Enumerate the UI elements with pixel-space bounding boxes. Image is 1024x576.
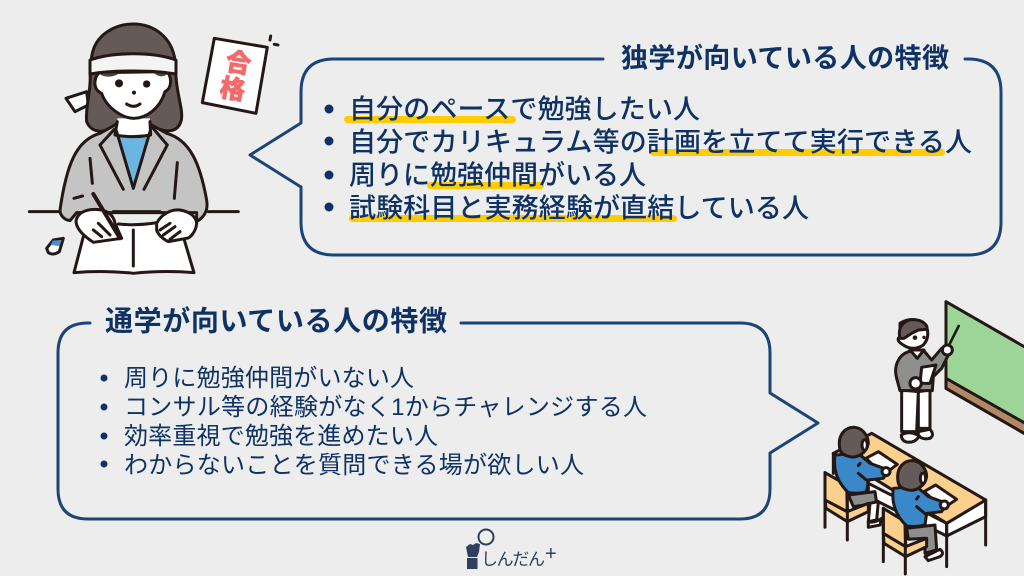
bullet list: classroom traits: わからないことを質問できる場が欲しい人 bbox=[124, 452, 584, 479]
bullet list: classroom traits: 周りに勉強仲間がいない人 bbox=[124, 365, 414, 392]
logo: しんだん+ bbox=[466, 530, 557, 569]
highlight: line 2 bbox=[650, 149, 945, 156]
bullet list: self-study traits: 試験科目と実務経験が直結している人 bbox=[349, 194, 809, 224]
icon: pass certificate: 合 bbox=[224, 48, 254, 80]
highlight: line 4 bbox=[349, 215, 677, 222]
bullet list: classroom traits: コンサル等の経験がなく1からチャレンジする人 bbox=[124, 394, 647, 421]
blackboard bbox=[946, 302, 1024, 437]
icon: hand with magnifier bbox=[466, 530, 494, 569]
heading: classroom: 通学が向いている人の特徴 bbox=[105, 304, 447, 336]
teacher bbox=[896, 320, 959, 442]
heading: self-study: 独学が向いている人の特徴 bbox=[621, 42, 949, 74]
bullet list: self-study traits bbox=[324, 94, 972, 224]
logo: しんだん+: + bbox=[545, 543, 557, 565]
icon: pass certificate bbox=[202, 36, 278, 113]
logo: しんだん+: しんだん bbox=[481, 550, 545, 569]
student 2 bbox=[883, 461, 948, 574]
icon: pass certificate: 格 bbox=[218, 74, 248, 106]
illustration: classroom bbox=[825, 302, 1024, 574]
bullet list: self-study traits: 周りに勉強仲間がいる人 bbox=[349, 160, 646, 190]
panel: self-study speech bubble bbox=[250, 42, 1001, 255]
desk bbox=[833, 433, 986, 567]
bullet list: classroom traits bbox=[100, 365, 647, 479]
highlight: line 3 bbox=[427, 182, 544, 189]
illustration: studying woman bbox=[29, 24, 278, 273]
bullet list: self-study traits: 自分のペースで勉強したい人 bbox=[349, 94, 700, 124]
panel: classroom speech bubble bbox=[58, 304, 818, 519]
student 1 bbox=[825, 427, 890, 540]
highlight: line 1 bbox=[344, 116, 516, 123]
bullet list: classroom traits: 効率重視で勉強を進めたい人 bbox=[124, 423, 438, 450]
bullet list: self-study traits: 自分でカリキュラム等の計画を立てて実行できる人 bbox=[349, 128, 972, 158]
